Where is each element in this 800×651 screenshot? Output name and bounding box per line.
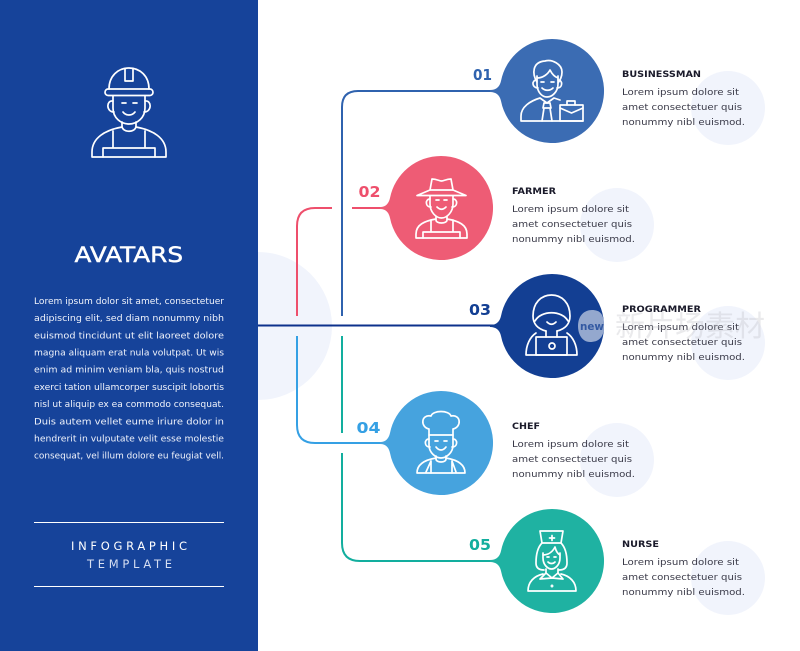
footer label — [34, 522, 224, 587]
text block: intro paragraph: hendrerit in vulputate velit esse molestie — [34, 434, 224, 444]
item 04: chef: Lorem ipsum dolore sit — [512, 439, 629, 450]
item 01: businessman: amet consectetuer quis — [622, 102, 742, 113]
pale decorative circles — [184, 71, 765, 615]
text: businessman: BUSINESSMAN — [622, 70, 701, 80]
number 04: 04 — [356, 419, 381, 437]
item 01: businessman — [473, 39, 745, 143]
node circle 05 — [490, 509, 604, 613]
item 03: programmer: nonummy nibl euismod. — [622, 352, 745, 363]
icon: programmer — [526, 295, 577, 355]
footer label: TEMPLATE — [86, 557, 172, 571]
icon: chef — [417, 412, 465, 473]
text block: intro paragraph: adipiscing elit, sed diam nonummy nibh — [34, 313, 224, 324]
number 02: 02 — [358, 183, 380, 201]
item 03: programmer — [469, 274, 745, 378]
text block: intro paragraph: Lorem ipsum dolor sit amet, consectetuer — [34, 296, 224, 307]
item 02: farmer — [358, 156, 635, 260]
title: AVATARS — [74, 243, 183, 267]
text block: intro paragraph: enim ad minim veniam bla, quis nostrud — [34, 364, 224, 376]
node circle 03 — [490, 274, 604, 378]
item 01: businessman: Lorem ipsum dolore sit — [622, 87, 739, 98]
item 03: programmer: amet consectetuer quis — [622, 337, 742, 348]
connector lines — [258, 91, 500, 561]
item 02: farmer: nonummy nibl euismod. — [512, 234, 635, 245]
item 05: nurse: nonummy nibl euismod. — [622, 587, 745, 598]
item 04: chef: amet consectetuer quis — [512, 454, 632, 465]
watermark: 新片场素材 — [615, 310, 765, 343]
number 05: 05 — [469, 536, 491, 554]
item 04: chef: nonummy nibl euismod. — [512, 469, 635, 480]
number 03: 03 — [469, 301, 491, 319]
number 01: 01 — [473, 66, 492, 84]
item 02: farmer: amet consectetuer quis — [512, 219, 632, 230]
node circle 02 — [380, 156, 493, 260]
item 02: farmer: Lorem ipsum dolore sit — [512, 204, 629, 215]
text block: intro paragraph: exerci tation ullamcorper suscipit lobortis — [34, 382, 224, 393]
item 05: nurse — [469, 509, 745, 613]
footer label: INFOGRAPHIC — [71, 539, 187, 553]
node circle 04 — [380, 391, 493, 495]
text block: intro paragraph — [34, 296, 224, 462]
text: chef: CHEF — [512, 422, 540, 432]
icon: nurse — [528, 531, 576, 591]
item 05: nurse: amet consectetuer quis — [622, 572, 742, 583]
node circle 01 — [490, 39, 604, 143]
text block: intro paragraph: nisl ut aliquip ex ea commodo consequat. — [34, 399, 224, 410]
icon: farmer — [416, 179, 467, 238]
item 04: chef — [356, 391, 635, 495]
item 05: nurse: Lorem ipsum dolore sit — [622, 557, 739, 568]
text block: intro paragraph: euismod tincidunt ut elit laoreet dolore — [34, 330, 224, 342]
text: farmer: FARMER — [512, 187, 556, 197]
item 03: programmer: Lorem ipsum dolore sit — [622, 322, 739, 333]
text: programmer: PROGRAMMER — [622, 305, 701, 315]
text block: intro paragraph: Duis autem vellet eume iriure dolor in — [34, 416, 224, 428]
text block: intro paragraph: magna aliquam erat nula volutpat. Ut wis — [34, 348, 224, 358]
watermark: new — [580, 320, 604, 333]
icon: construction worker — [92, 68, 166, 157]
icon: businessman — [521, 61, 583, 121]
panel: left sidebar — [0, 0, 258, 651]
text block: intro paragraph: consequat, vel illum dolore eu feugiat vell. — [34, 450, 224, 462]
text: nurse: NURSE — [622, 540, 659, 550]
item 01: businessman: nonummy nibl euismod. — [622, 117, 745, 128]
